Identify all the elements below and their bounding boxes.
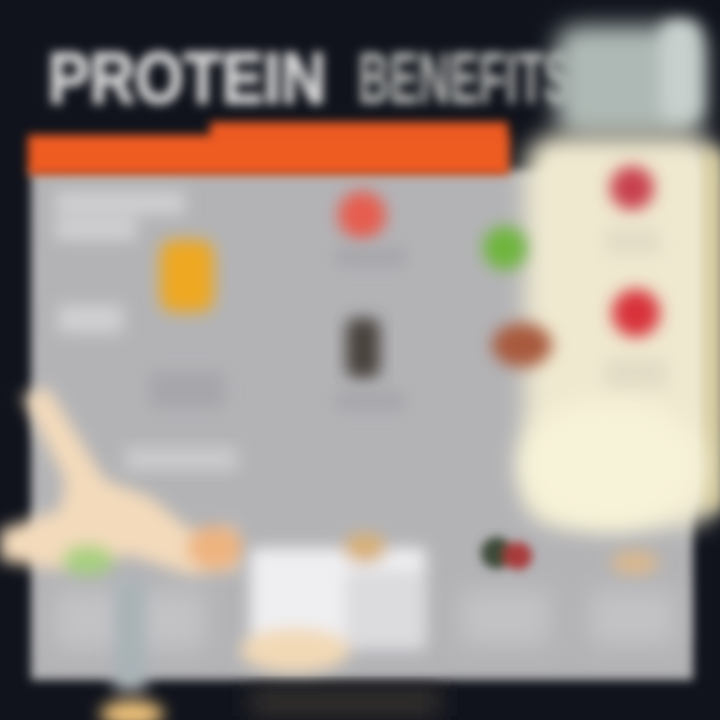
icon: dark bottle — [346, 318, 380, 378]
footer: dark strip items — [250, 688, 440, 716]
illustration: flexed arm — [0, 388, 243, 575]
text block: bottle captions — [605, 228, 667, 388]
title — [48, 39, 573, 119]
panel: main grey board — [31, 170, 693, 680]
icon: green vegetable — [483, 226, 527, 270]
text block: bottom captions — [55, 590, 675, 650]
icon: red apple top centre — [338, 191, 386, 239]
icon: meat — [492, 323, 552, 367]
bottle: protein shake — [518, 20, 720, 530]
illustration: glass at bottom left — [100, 580, 164, 720]
icon: red berry lower — [612, 289, 660, 337]
icon: orange jar — [160, 240, 214, 312]
text block: captions — [150, 248, 407, 410]
title: BENEFITS — [358, 39, 573, 119]
title: PROTEIN — [48, 39, 326, 119]
banner: orange heading bar — [28, 122, 510, 175]
icon: red berry upper — [610, 166, 654, 210]
icon: tan food — [611, 550, 659, 576]
text block: left label — [125, 447, 237, 471]
text block: left column top — [55, 192, 185, 333]
illustration: white shaker box — [240, 533, 426, 672]
icon: dark fruit — [481, 537, 532, 570]
